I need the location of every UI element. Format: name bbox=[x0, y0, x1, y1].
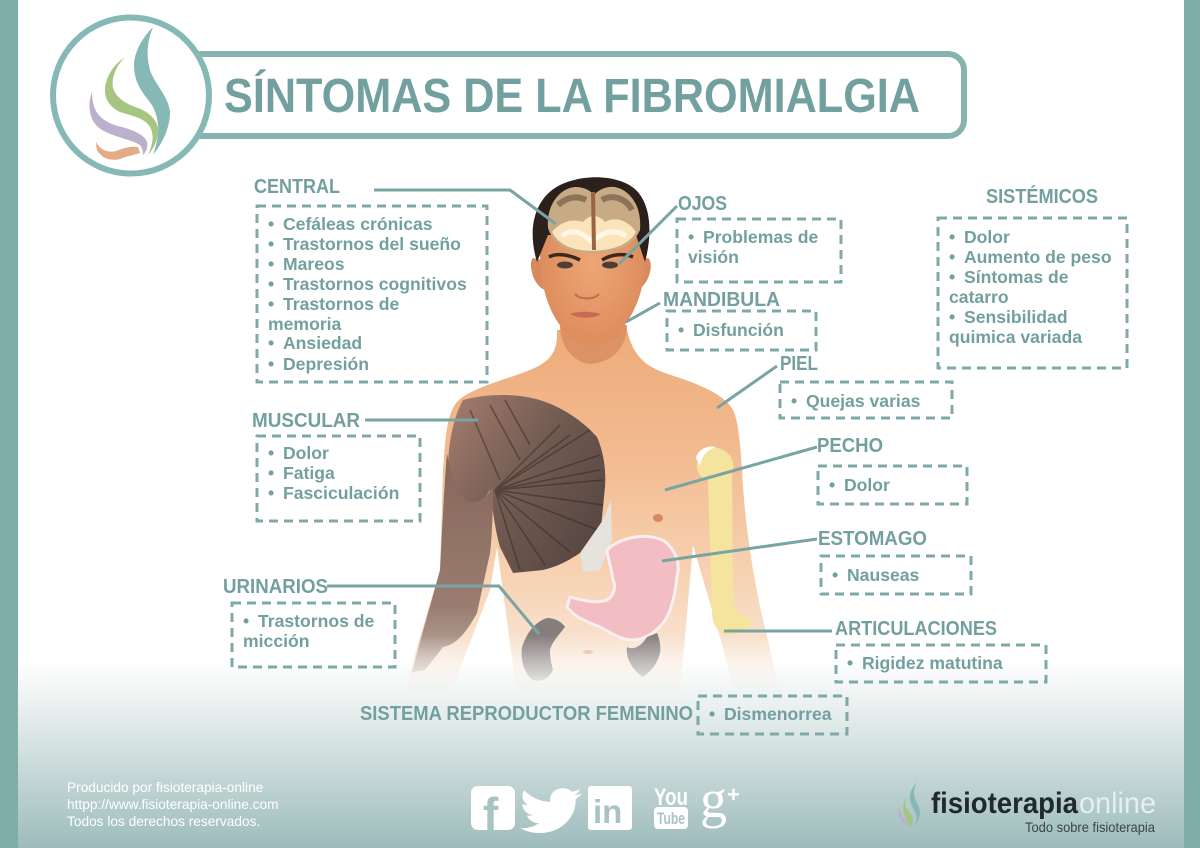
group: piel: PIEL bbox=[780, 353, 818, 375]
hair bbox=[533, 177, 649, 262]
group: sistémicos: • Aumento de peso bbox=[949, 247, 1112, 267]
group: ojos: • Problemas de bbox=[688, 227, 819, 247]
ears bbox=[531, 258, 651, 290]
left side bar bbox=[0, 0, 18, 848]
title banner bbox=[185, 54, 964, 136]
neck shadow bbox=[560, 325, 627, 364]
muscle fibres bbox=[470, 400, 603, 570]
muscle chest bbox=[448, 395, 605, 573]
group: sistema reproductor bbox=[360, 696, 847, 734]
group: urinarios: micción bbox=[243, 631, 309, 651]
group: mandibula: • Disfunción bbox=[678, 320, 784, 340]
footer credits: Todos los derechos reservados. bbox=[67, 814, 260, 829]
group: muscular bbox=[252, 410, 420, 521]
footer logo: Todo sobre fisioterapia bbox=[1025, 819, 1155, 835]
icon: linkedin bbox=[588, 786, 632, 830]
group: central: • Mareos bbox=[268, 254, 345, 274]
group: articulaciones: ARTICULACIONES bbox=[835, 618, 997, 640]
footer logo: online bbox=[1079, 787, 1156, 820]
icon: twitter bbox=[520, 788, 582, 833]
group: urinarios: • Trastornos de bbox=[243, 611, 375, 631]
group: ojos bbox=[677, 193, 841, 282]
group: articulaciones: • Rigidez matutina bbox=[847, 653, 1003, 673]
group: estomago bbox=[818, 528, 971, 594]
leader lines bbox=[327, 190, 832, 634]
title banner: SÍNTOMAS DE LA FIBROMIALGIA bbox=[224, 69, 920, 123]
group: sistema reproductor: SISTEMA REPRODUCTOR FEMENINO bbox=[360, 703, 693, 725]
footer logo: fisioterapia bbox=[931, 787, 1078, 820]
icon: youtube: You bbox=[654, 784, 688, 811]
group: central: • Trastornos cognitivos bbox=[268, 274, 467, 294]
group: central: memoria bbox=[268, 314, 342, 334]
group: central: • Depresión bbox=[268, 354, 369, 374]
nipple and navel bbox=[653, 514, 663, 522]
group: sistémicos bbox=[938, 185, 1127, 368]
group: central: • Trastornos de bbox=[268, 294, 400, 314]
group: central: • Ansiedad bbox=[268, 333, 362, 353]
kidneys bbox=[522, 618, 565, 681]
eyes and brows bbox=[549, 255, 633, 260]
group: muscular: • Fasciculación bbox=[268, 483, 399, 503]
stomach bbox=[567, 536, 678, 640]
footer credits: Producido por fisioterapia-online bbox=[67, 780, 263, 795]
group: muscular: MUSCULAR bbox=[252, 410, 361, 432]
group: sistémicos: • Sensibilidad bbox=[949, 307, 1068, 327]
group: sistémicos: catarro bbox=[949, 287, 1009, 307]
group: sistémicos: • Dolor bbox=[949, 227, 1010, 247]
icon: linkedin: in bbox=[593, 793, 622, 830]
group: piel bbox=[780, 353, 952, 418]
group: muscular: • Dolor bbox=[268, 443, 329, 463]
human body illustration bbox=[405, 177, 780, 695]
brain bbox=[548, 187, 640, 253]
footer logo bbox=[898, 782, 1156, 835]
group: urinarios: URINARIOS bbox=[223, 576, 328, 598]
icon: google plus: + bbox=[727, 782, 740, 807]
group: sistémicos: SISTÉMICOS bbox=[986, 185, 1098, 208]
group: urinarios bbox=[223, 576, 395, 667]
footer credits: httpp://www.fisioterapia-online.com bbox=[67, 797, 278, 812]
background gradient bbox=[0, 660, 1200, 848]
group: ojos: OJOS bbox=[678, 193, 727, 215]
humerus bone bbox=[697, 448, 752, 634]
icon: facebook bbox=[471, 786, 515, 840]
icon: youtube: Tube bbox=[657, 809, 685, 828]
icon: facebook: f bbox=[483, 788, 499, 840]
muscle arm bbox=[412, 453, 493, 672]
group: central bbox=[254, 176, 487, 382]
neck and torso bbox=[405, 330, 780, 695]
tendons bbox=[580, 500, 612, 572]
icon: google plus bbox=[700, 769, 740, 829]
group: pecho bbox=[817, 435, 967, 504]
group: muscular: • Fatiga bbox=[268, 463, 335, 483]
logo circle bbox=[53, 18, 209, 174]
group: sistémicos: quimica variada bbox=[949, 327, 1082, 347]
group: sistémicos: • Síntomas de bbox=[949, 267, 1069, 287]
group: central: • Cefáleas crónicas bbox=[268, 214, 433, 234]
group: mandibula bbox=[663, 289, 816, 350]
group: sistema reproductor: • Dismenorrea bbox=[709, 704, 832, 724]
shoulder joint bbox=[696, 446, 716, 466]
group: estomago: • Nauseas bbox=[832, 565, 920, 585]
group: central: • Trastornos del sueño bbox=[268, 234, 461, 254]
icon: google plus: g bbox=[700, 769, 727, 829]
head bbox=[540, 235, 646, 326]
group: central: CENTRAL bbox=[254, 176, 340, 198]
group: pecho: PECHO bbox=[817, 435, 883, 457]
icon: youtube bbox=[654, 784, 688, 829]
nose and mouth bbox=[575, 294, 599, 298]
group: estomago: ESTOMAGO bbox=[818, 528, 927, 550]
social icons bbox=[471, 769, 740, 840]
group: articulaciones bbox=[835, 618, 1046, 682]
group: pecho: • Dolor bbox=[829, 475, 890, 495]
group: mandibula: MANDIBULA bbox=[663, 289, 780, 311]
group: piel: • Quejas varias bbox=[791, 391, 921, 411]
group: ojos: visión bbox=[688, 247, 739, 267]
right side bar bbox=[1184, 0, 1200, 848]
